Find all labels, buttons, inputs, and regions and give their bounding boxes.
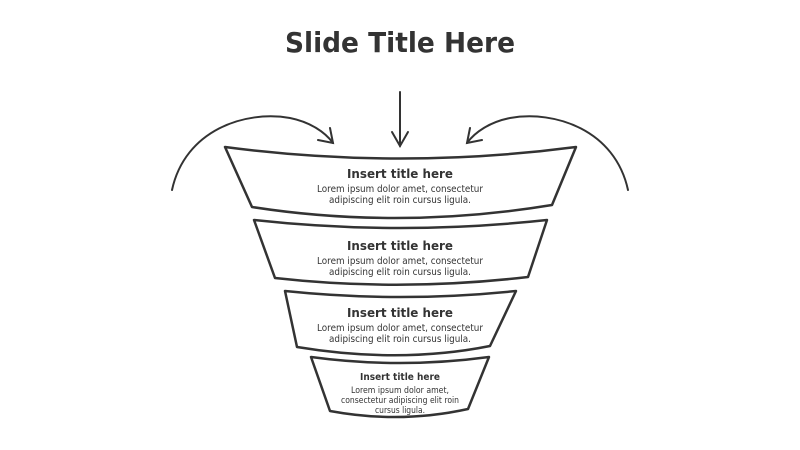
- funnel level 2: adipiscing elit roin cursus ligula.: [329, 267, 471, 278]
- title: Slide Title Here: [285, 26, 515, 59]
- funnel level 4: consectetur adipiscing elit roin: [341, 396, 459, 406]
- funnel level 1: Insert title here: [347, 166, 453, 181]
- funnel level 1: [225, 147, 576, 218]
- funnel level 1: adipiscing elit roin cursus ligula.: [329, 195, 471, 206]
- arrow: left curved: [172, 116, 333, 190]
- funnel level 3: Lorem ipsum dolor amet, consectetur: [317, 323, 483, 334]
- funnel level 3: Insert title here: [347, 305, 453, 320]
- funnel level 2: Lorem ipsum dolor amet, consectetur: [317, 256, 483, 267]
- funnel level 3: [285, 291, 516, 355]
- funnel level 3: adipiscing elit roin cursus ligula.: [329, 334, 471, 345]
- funnel level 4: Insert title here: [360, 372, 440, 383]
- funnel level 2: Insert title here: [347, 238, 453, 253]
- funnel level 2: [254, 220, 547, 285]
- funnel level 4: cursus ligula.: [375, 406, 425, 416]
- funnel level 1: Lorem ipsum dolor amet, consectetur: [317, 184, 483, 195]
- arrow: right curved: [467, 116, 628, 190]
- funnel level 4: [311, 357, 489, 417]
- funnel level 4: Lorem ipsum dolor amet,: [351, 386, 449, 396]
- arrow: top center: [392, 92, 408, 146]
